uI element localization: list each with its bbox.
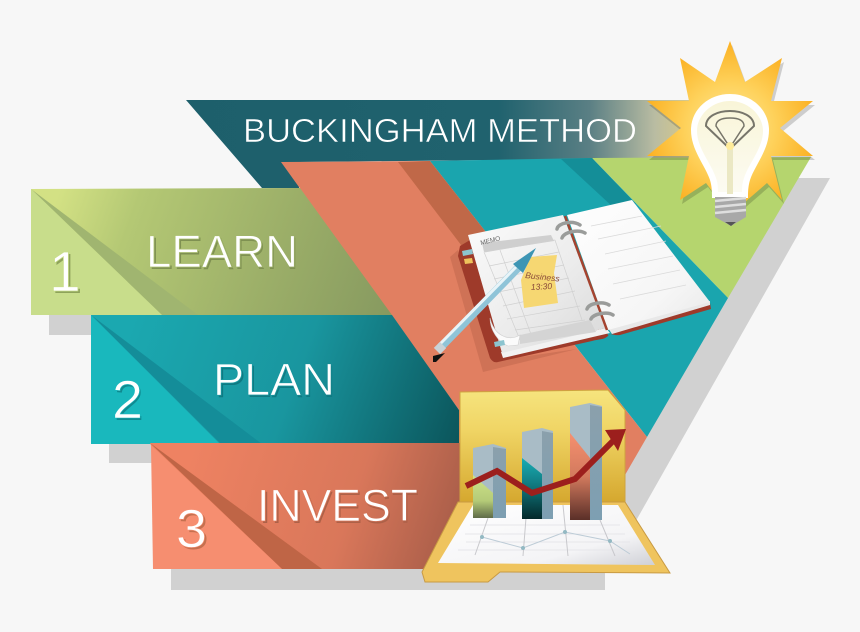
memo label: MEMO — [480, 235, 501, 247]
folder back — [460, 390, 625, 503]
salmon fold — [398, 161, 500, 262]
step 1 learn band: 1 — [49, 240, 81, 304]
bulb screw base — [715, 197, 746, 226]
step 3 invest band: 3 — [176, 499, 207, 559]
sunburst — [647, 41, 813, 215]
number 2: 2 — [114, 372, 144, 432]
number 3: 3 — [178, 501, 209, 561]
banner ribbon — [186, 100, 700, 188]
spine — [565, 216, 607, 330]
folder front — [422, 502, 670, 582]
panel: salmon slanted band — [281, 161, 647, 475]
bar 1 — [473, 444, 506, 518]
teal fold — [561, 158, 636, 208]
panel: green triangle — [592, 157, 811, 298]
right page lines — [591, 216, 686, 299]
white sheet — [438, 505, 655, 565]
step 1 learn band — [31, 188, 392, 315]
icon: light bulb with sunburst — [647, 41, 815, 226]
notebook shadow — [450, 250, 577, 372]
memo grid — [484, 240, 585, 340]
index tabs — [462, 249, 505, 347]
sheet chart — [458, 505, 635, 556]
label learn: LEARN — [148, 228, 299, 279]
icon: open notebook — [433, 200, 711, 372]
icon: chart folder — [422, 390, 670, 582]
sticky note: Business — [525, 270, 561, 284]
bulb glass — [691, 94, 769, 198]
label plan: PLAN — [215, 356, 336, 407]
rising arrow — [466, 429, 626, 493]
step 1 learn band: LEARN — [146, 226, 298, 277]
title: BUCKINGHAM METHOD — [243, 112, 637, 149]
bar 2 — [522, 428, 553, 519]
star shadow — [649, 45, 815, 219]
left page — [468, 215, 606, 353]
number 1: 1 — [51, 242, 83, 306]
step 2 plan band: 2 — [112, 370, 143, 430]
memo label — [480, 235, 554, 252]
right page — [567, 200, 710, 330]
red cover — [458, 225, 711, 362]
filament — [706, 111, 754, 148]
grey drop shadows — [49, 178, 830, 590]
bar 3 — [570, 403, 602, 520]
sticky note — [521, 255, 561, 308]
step 3 invest band — [150, 443, 462, 569]
pen — [433, 248, 536, 362]
step 2 plan band: PLAN — [213, 354, 335, 405]
step 3 invest band: INVEST — [257, 480, 418, 531]
step 2 plan band — [91, 315, 459, 444]
page block edge — [501, 328, 610, 358]
label invest: INVEST — [259, 482, 419, 533]
sticky note: 13:30 — [531, 281, 553, 292]
page curl — [490, 318, 596, 346]
rings — [557, 222, 613, 319]
panel: teal slanted band — [430, 158, 728, 437]
